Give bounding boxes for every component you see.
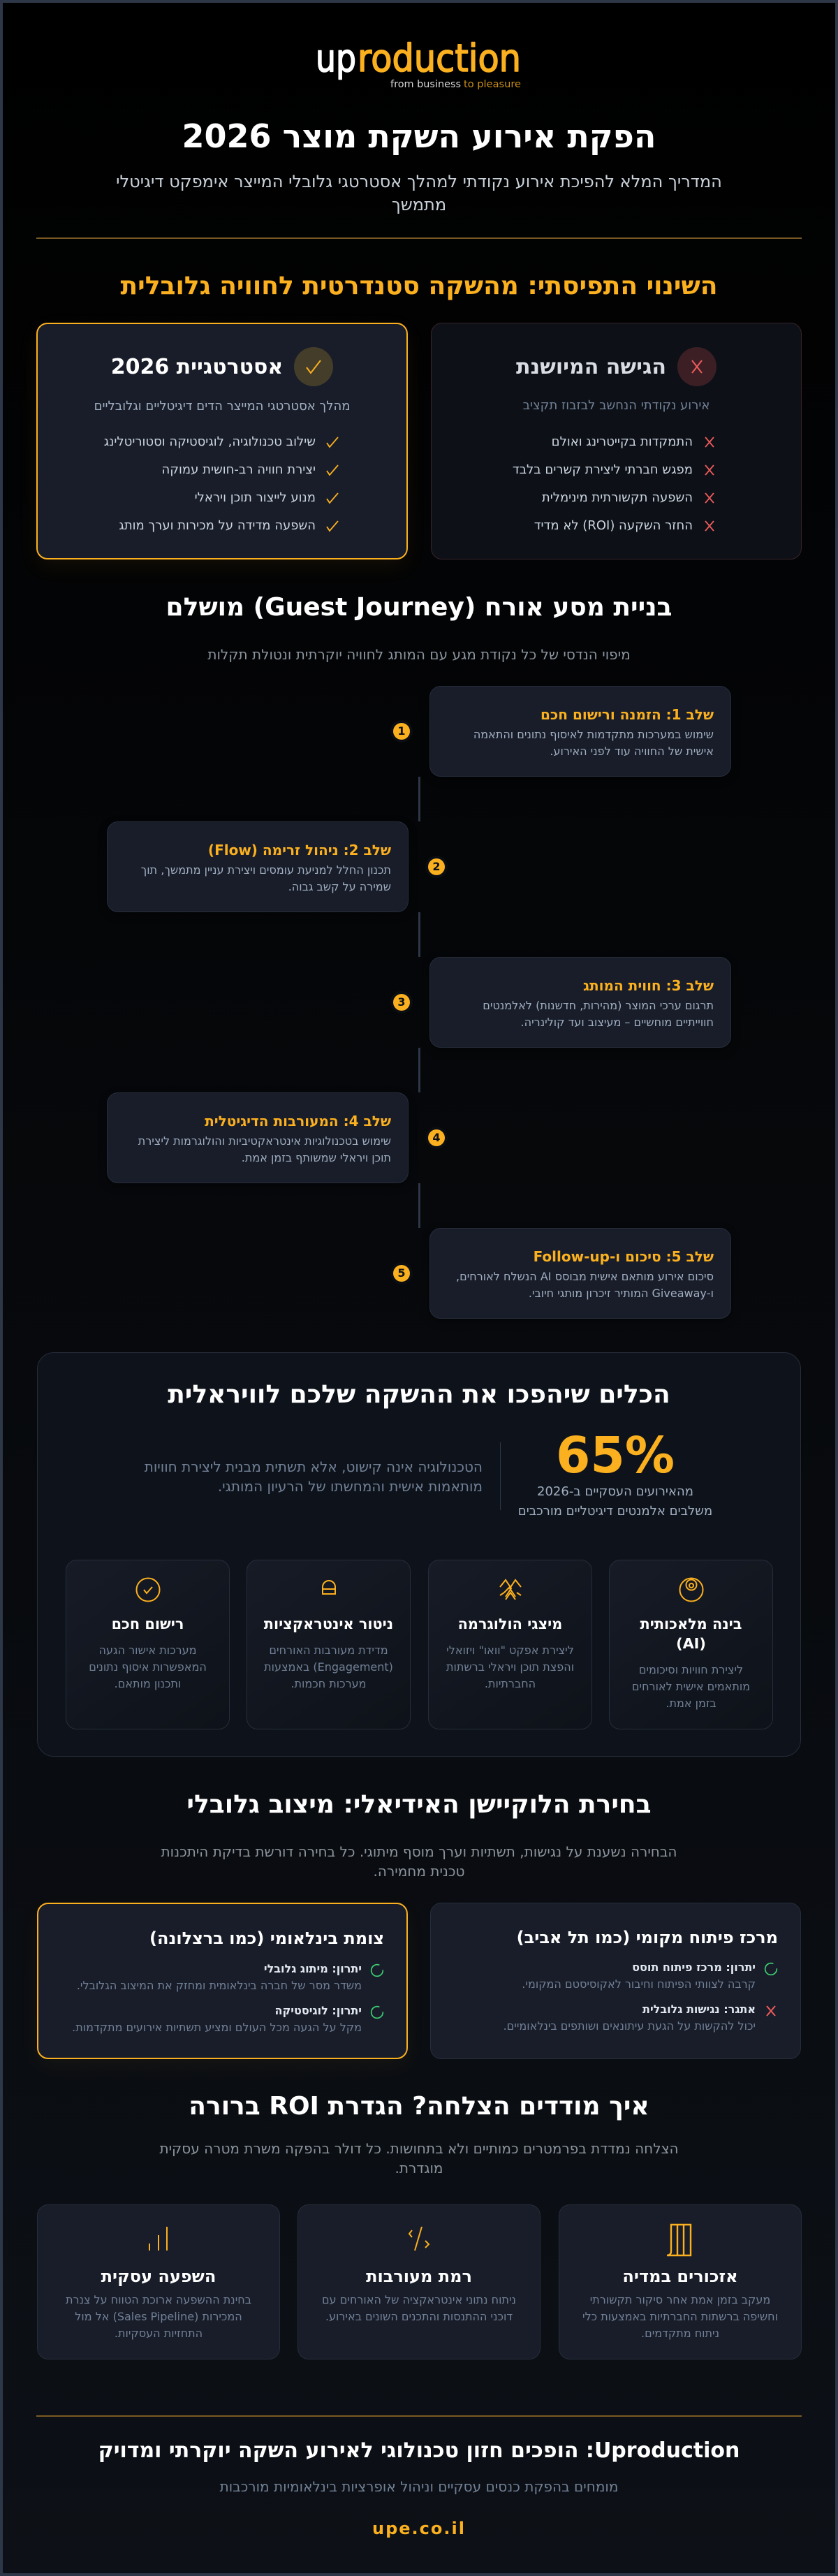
- step 2: שמירה על קשב גבוה.: [288, 880, 391, 893]
- icon: hologram: [499, 1579, 522, 1600]
- advantage: יתרון: מרכז פיתוח תוסס: [632, 1961, 756, 1974]
- step 1 marker: 1: [397, 724, 406, 738]
- step 1: אישית של החוויה עוד לפני האירוע.: [550, 745, 714, 758]
- ROI subtitle: מוגדרת.: [395, 2160, 443, 2176]
- subtitle: [116, 172, 722, 214]
- tool card: smart registration: המאפשרות איסוף נתונים: [89, 1660, 207, 1674]
- step 5 marker: 5: [397, 1266, 406, 1280]
- step 4: תוכן ויראלי שמשותף בזמן אמת.: [242, 1151, 391, 1164]
- journey subtitle: מיפוי הנדסי של כל נקודת מגע עם המותג לחוויה יוקרתית ונטולת תקלות: [207, 646, 631, 663]
- logo: from business: [390, 79, 461, 90]
- challenge icon: [766, 2005, 776, 2017]
- stat description: [144, 1458, 483, 1495]
- tool card: hologram: החברתיות.: [485, 1677, 536, 1690]
- step 3: [429, 957, 731, 1048]
- step 4 marker: [428, 1129, 445, 1146]
- heading: guest journey: בניית מסע אורח (Guest Journey) מושלם: [166, 593, 672, 622]
- panel: global hub: [37, 1903, 408, 2059]
- ROI card: engagement: דוכני ההתנסות והתכנים השונים באירוע.: [325, 2310, 513, 2323]
- subtitle: מתמשך: [392, 195, 446, 214]
- footer link: upe.co.il: [372, 2519, 466, 2538]
- ROI card: media: מעקב בזמן אמת אחר סיקור תקשורתי: [590, 2293, 770, 2306]
- tool card: hologram: ליצירת אפקט "וואו" ויזואלי: [446, 1644, 574, 1657]
- advantage icon: [764, 1963, 778, 1975]
- icon: registration: [135, 1577, 161, 1602]
- ROI card: engagement: ניתוח נתוני אינטראקציה של האורחים עם: [322, 2293, 516, 2306]
- ROI card: business impact: התחזיות העסקיות.: [115, 2327, 203, 2340]
- tool card: smart registration: [66, 1560, 230, 1729]
- ROI card: media: וחשיפה ברשתות החברתיות באמצעות כלי: [582, 2310, 778, 2323]
- step 4: שלב 4: המעורבות הדיגיטלית: [205, 1113, 391, 1129]
- panel: global hub: מקל על הגעה מכל העולם ומציע תשתיות אירועים מתקדמות.: [72, 2021, 362, 2034]
- stat description: מותאמות אישית והמחשתו של הרעיון המותגי.: [218, 1478, 483, 1495]
- step 2: תכנון החלל למניעת עומסים ויצירת עניין מתמשך, תוך: [141, 863, 391, 877]
- strategy subtitle: מהלך אסטרטגי המייצר הדים דיגיטליים וגלובליים: [94, 399, 350, 414]
- strategy list: השפעה מדידה על מכירות וערך מותג: [119, 518, 316, 533]
- advantage icon: [370, 2006, 384, 2019]
- tool card: smart registration: רישום חכם: [112, 1616, 184, 1632]
- challenge: אתגר: נגישות גלובלית: [642, 2003, 756, 2016]
- title: הפקת אירוע השקת מוצר 2026: [182, 117, 656, 155]
- icon: AI: [679, 1577, 704, 1602]
- old approach list: החזר השקעה (ROI) לא מדיד: [534, 518, 693, 533]
- old approach list: התמקדות בקייטרינג ואולם: [552, 434, 693, 449]
- location subtitle: הבחירה נשענת על נגישות, תשתיות וערך מוסף מיתוגי. כל בחירה דורשת בדיקת היתכנות: [161, 1843, 677, 1860]
- heading: paradigm shift: השינוי התפיסתי: מהשקה סטנדרטית לחוויה גלובלית: [121, 272, 717, 300]
- step 1: [429, 686, 731, 777]
- subtitle: המדריך המלא להפיכת אירוע נקודתי למהלך אסטרטגי גלובלי המייצר אימפקט דיגיטלי: [116, 172, 722, 191]
- panel: 2026 strategy: [36, 323, 408, 559]
- stat: 65%: 65%: [556, 1426, 675, 1484]
- step 4: [107, 1092, 409, 1183]
- ROI card: business impact: בחינת ההשפעה ארוכת הטווח על צנרת: [66, 2293, 251, 2306]
- panel: old approach: [431, 323, 802, 559]
- tool card: hologram: והפצת תוכן ויראלי ברשתות: [446, 1660, 574, 1674]
- tool card: AI: מותאמים אישית לאורחים: [632, 1680, 750, 1693]
- step 2: שלב 2: ניהול זרימה (Flow): [208, 842, 391, 858]
- tool card: AI: ליצירת חוויות וסיכומים: [639, 1663, 743, 1676]
- icon: newspaper: [667, 2224, 691, 2256]
- ROI subtitle: [159, 2140, 679, 2176]
- location subtitle: [161, 1843, 677, 1880]
- panel: local hub: קרבה לצוותי הפיתוח וחיבור לאקוסיסטם המקומי.: [522, 1977, 756, 1991]
- stat: 65%: [518, 1426, 712, 1518]
- step 5: ו-Giveaway המותיר זיכרון מותגי חיובי.: [529, 1287, 714, 1300]
- old approach header: הגישה המיושנת: [516, 355, 666, 379]
- ROI card: engagement: [297, 2204, 541, 2359]
- advantage: branding: יתרון: מיתוג גלובלי: [264, 1962, 362, 1975]
- footer subtitle: מומחים בהפקת כנסים עסקיים וניהול אופרציות בינלאומיות מורכבות: [220, 2478, 618, 2495]
- step 3: חווייתיים מוחשיים – מעיצוב ועד קולינריה.: [521, 1016, 714, 1029]
- step 5: שלב 5: סיכום ו-Follow-up: [534, 1248, 714, 1265]
- strategy list: שילוב טכנולוגיה, לוגיסטיקה וסטוריטלינג: [104, 434, 316, 449]
- footer heading: Uproduction: הופכים חזון טכנולוגי לאירוע השקה יוקרתי ומדויק: [98, 2438, 740, 2463]
- step 5 marker: [393, 1265, 410, 1282]
- old approach list: השפעה תקשורתית מינימלית: [542, 490, 693, 505]
- tool card: AI: בזמן אמת.: [666, 1697, 716, 1710]
- step 3 marker: [393, 994, 410, 1011]
- panel: local hub: יכול להקשות על הגעת עיתונאים ושותפים בינלאומיים.: [503, 2019, 756, 2033]
- ROI card: media: [559, 2204, 802, 2359]
- step 4: שימוש בטכנולוגיות אינטראקטיביות והולוגרמות ליצירת: [138, 1134, 391, 1148]
- step 3: תרגום ערכי המוצר (מהירות, חדשנות) לאלמנטים: [483, 999, 714, 1012]
- panel: local hub: [430, 1903, 801, 2059]
- ROI card: business impact: השפעה עסקית: [101, 2267, 216, 2286]
- step 3: שלב 3: חווית המותג: [583, 977, 714, 994]
- stat: 65%: משלבים אלמנטים דיגיטליים מורכבים: [518, 1504, 712, 1518]
- strategy list: [104, 434, 339, 533]
- strategy header: אסטרטגיית 2026: [111, 355, 283, 379]
- tool card: AI: בינה מלאכותית: [640, 1616, 742, 1632]
- step 3 marker: 3: [397, 995, 406, 1009]
- step 1: שלב 1: הזמנה ורישום חכם: [541, 706, 714, 723]
- logo: to pleasure: [464, 79, 521, 90]
- tool card: interaction monitoring: מערכות חכמות.: [291, 1677, 367, 1690]
- tools heading: הכלים שיהפכו את ההשקה שלכם לוויראלית: [168, 1380, 670, 1409]
- old approach subtitle: אירוע נקודתי הנחשב לבזבוז תקציב: [523, 398, 710, 413]
- old approach list: [513, 434, 714, 533]
- logo: up: [316, 36, 356, 80]
- tool card: AI: [609, 1560, 773, 1729]
- heading: ROI: איך מודדים הצלחה? הגדרת ROI ברורה: [189, 2092, 649, 2121]
- tool card: interaction monitoring: ניטור אינטראקציות: [264, 1616, 393, 1632]
- step 5: [429, 1228, 731, 1319]
- logo: [316, 36, 521, 90]
- strategy header: [111, 347, 333, 386]
- tool card: smart registration: מערכות אישור הגעה: [99, 1644, 196, 1657]
- old approach list: מפגש חברתי ליצירת קשרים בלבד: [513, 462, 693, 477]
- tool card: hologram: מיצגי הולוגרמה: [458, 1616, 562, 1632]
- strategy list: יצירת חוויה רב-חושית עמוקה: [162, 462, 316, 477]
- advantage: logistics: יתרון: לוגיסטיקה: [275, 2004, 362, 2017]
- stat: 65%: מהאירועים העסקיים ב-2026: [537, 1484, 693, 1499]
- panel: tools: [37, 1352, 801, 1757]
- ROI card: media: ניתוח מתקדמים.: [641, 2327, 719, 2340]
- ROI card: engagement: רמת מעורבות: [366, 2267, 472, 2286]
- heading: location: בחירת הלוקיישן האידיאלי: מיצוב גלובלי: [186, 1790, 652, 1819]
- global hub title: צומת בינלאומי (כמו ברצלונה): [149, 1929, 384, 1948]
- step 2: [107, 821, 409, 912]
- logo: roduction: [358, 36, 521, 80]
- step 5: סיכום אירוע מותאם אישית מבוסס AI הנשלח לאורחים,: [456, 1270, 714, 1283]
- icon: code slash: [408, 2227, 430, 2251]
- step 1: שימוש במערכות מתקדמות לאיסוף נתונים והתאמה: [473, 728, 714, 741]
- strategy list: מנוע לייצור תוכן ויראלי: [195, 490, 316, 505]
- ROI subtitle: הצלחה נמדדת בפרמטרים כמותיים ולא בתחושות. כל דולר בהפקה משרת מטרה עסקית: [159, 2140, 679, 2157]
- tool card: AI: (AI): [676, 1635, 706, 1652]
- icon: bar chart: [149, 2227, 168, 2251]
- step 2 marker: [428, 858, 445, 875]
- icon: monitoring: [322, 1580, 336, 1595]
- step 2 marker: 2: [432, 860, 441, 873]
- step 1 marker: [393, 723, 410, 740]
- step 4 marker: 4: [432, 1131, 441, 1144]
- ROI card: business impact: [37, 2204, 280, 2359]
- tool card: smart registration: ותכנון מותאם.: [115, 1677, 181, 1690]
- panel: global hub: משדר מסר של חברה בינלאומית ומחזק את המיצוב הגלובלי.: [77, 1979, 362, 1992]
- tool card: interaction monitoring: (Engagement) באמצעות: [264, 1660, 393, 1674]
- stat description: הטכנולוגיה אינה קישוט, אלא תשתית מבנית ליצירת חוויות: [145, 1458, 483, 1475]
- tool card: hologram: [428, 1560, 592, 1729]
- advantage icon: [370, 1964, 384, 1977]
- ROI card: business impact: המכירות (Sales Pipeline) אל מול: [75, 2310, 242, 2323]
- tool card: interaction monitoring: מדידת מעורבות האורחים: [269, 1644, 388, 1657]
- timeline: [107, 686, 731, 1319]
- tool card: interaction monitoring: [247, 1560, 411, 1729]
- old approach header: [516, 347, 716, 386]
- ROI card: media: אזכורים במדיה: [622, 2267, 738, 2286]
- location subtitle: טכנית מחמירה.: [374, 1863, 464, 1880]
- local hub title: מרכז פיתוח מקומי (כמו תל אביב): [517, 1928, 778, 1947]
